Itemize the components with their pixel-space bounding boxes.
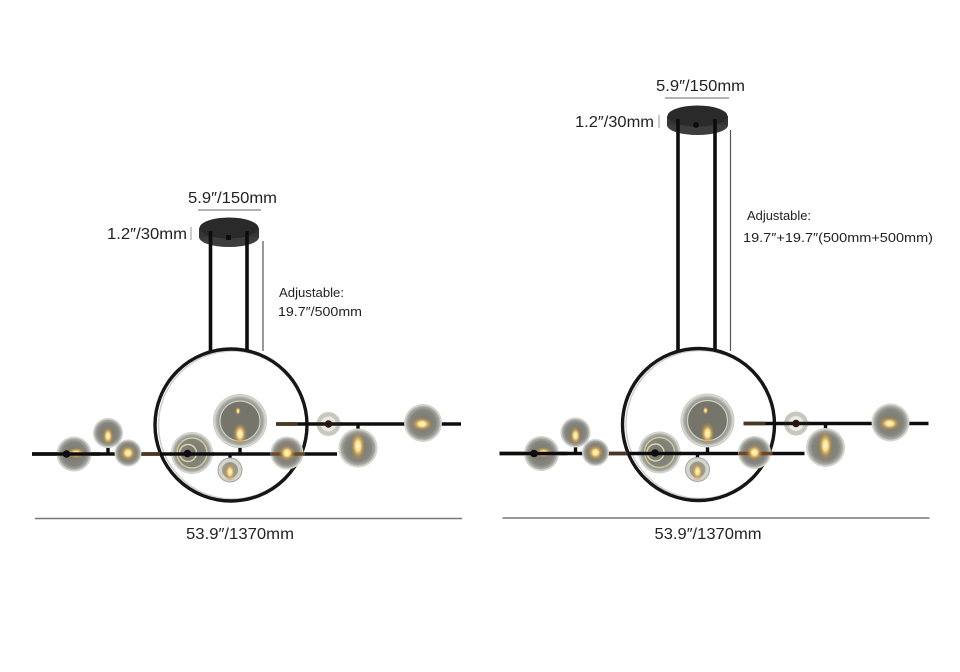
dimension: canopy width, left: 5.9″/150mm	[188, 190, 277, 207]
dimension: adjustable length, right: 19.7″+19.7″(500mm+500mm)	[743, 230, 933, 245]
dimension: adjustable length, left: Adjustable:	[279, 285, 344, 300]
suspension rods	[678, 119, 715, 351]
circular ring frame	[155, 349, 307, 501]
dimension: overall width, right: 53.9″/1370mm	[654, 526, 762, 543]
dimension: overall width, left: 53.9″/1370mm	[186, 526, 294, 543]
chandelier: left, single-length rods	[32, 218, 461, 501]
horizontal bars	[32, 424, 461, 460]
suspension rods	[210, 231, 247, 351]
dimension: adjustable length, left: 19.7″/500mm	[278, 304, 362, 319]
ceiling canopy	[199, 218, 259, 247]
glass globes	[32, 394, 442, 482]
dimension: canopy height, left: 1.2″/30mm	[107, 226, 187, 243]
dimension: adjustable length, right: Adjustable:	[747, 208, 811, 223]
horizontal bars	[500, 424, 928, 460]
dimension: canopy height, right: 1.2″/30mm	[575, 114, 654, 131]
circular ring frame	[622, 348, 774, 500]
ceiling canopy	[667, 106, 728, 135]
chandelier: right, extended rods	[500, 106, 928, 500]
dimension: adjustable length, right	[730, 130, 933, 351]
glass globes	[500, 394, 910, 482]
dimension: canopy width, right: 5.9″/150mm	[656, 78, 745, 95]
dimension: adjustable length, left	[263, 241, 362, 351]
